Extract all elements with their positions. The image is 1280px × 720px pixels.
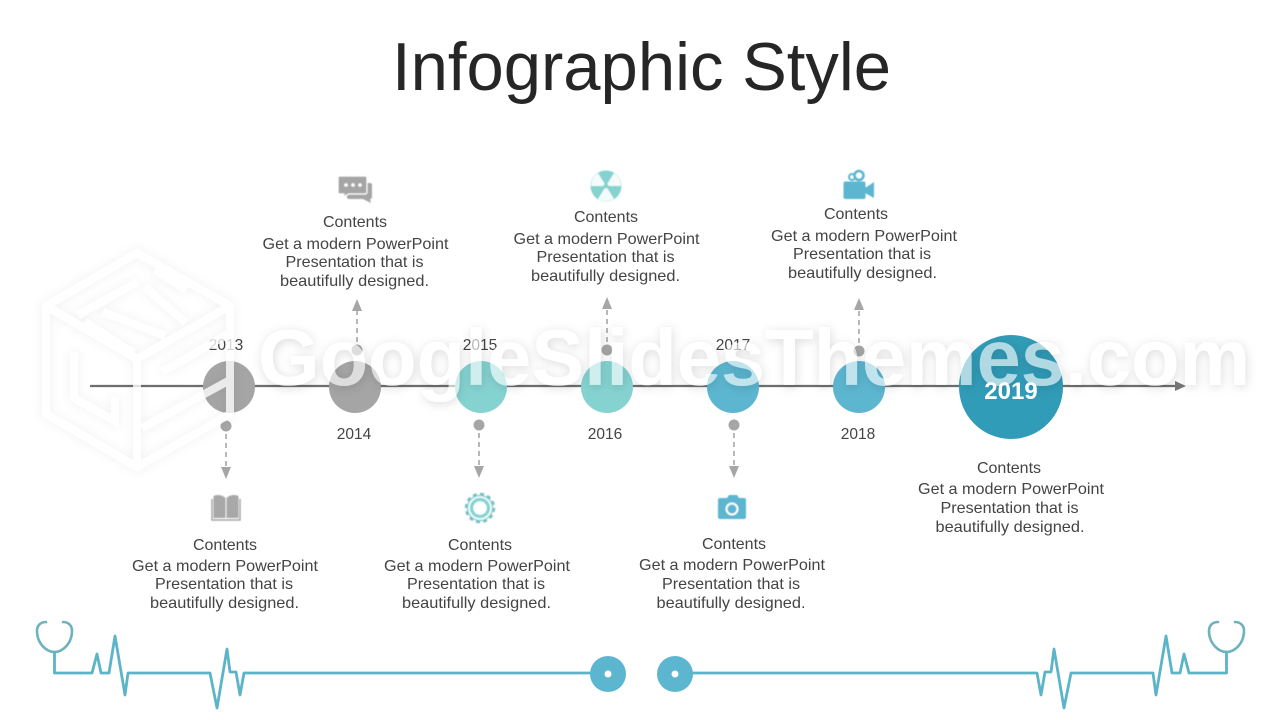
node 2013 — [203, 361, 255, 413]
text block: 2013: Get a modern PowerPoint — [132, 558, 319, 575]
arrow down 2013 — [220, 420, 232, 479]
icon: radiation — [590, 170, 622, 202]
text block: 2018: Contents — [824, 206, 888, 223]
text block: 2017: beautifully designed. — [656, 595, 806, 612]
text block: 2019: Presentation that is — [940, 500, 1078, 517]
text block: 2017: Presentation that is — [662, 576, 800, 593]
icon: gear — [466, 494, 494, 522]
left stethoscope and ECG line — [37, 622, 592, 708]
text block: 2015: Contents — [448, 537, 512, 554]
text block: 2017: Contents — [702, 536, 766, 553]
text block: 2016: Presentation that is — [536, 249, 674, 266]
node 2015 — [455, 361, 507, 413]
right stethoscope and ECG line — [692, 622, 1244, 708]
year labels — [209, 337, 875, 443]
icon: speech bubbles — [338, 176, 372, 203]
text block: 2015: Get a modern PowerPoint — [384, 558, 571, 575]
text block: 2013: Contents — [193, 537, 257, 554]
text block: 2013: Presentation that is — [155, 576, 293, 593]
text block: 2013 — [132, 537, 319, 612]
year labels: 2013 — [209, 337, 243, 354]
text block: 2019 — [918, 460, 1105, 536]
arrow up 2016 — [602, 297, 612, 356]
text block: 2014 — [262, 214, 449, 290]
text block: 2018: Presentation that is — [793, 246, 931, 263]
footer heartbeat with stethoscopes — [37, 622, 1244, 708]
node 2016 — [581, 361, 633, 413]
arrow down 2017 — [728, 420, 740, 478]
node 2018 — [833, 361, 885, 413]
text block: 2014: beautifully designed. — [280, 273, 429, 290]
icon: video camera — [844, 171, 874, 199]
text block: 2013: beautifully designed. — [150, 595, 299, 612]
arrow up 2018 — [854, 298, 864, 356]
text block: 2014: Get a modern PowerPoint — [262, 236, 449, 253]
year labels: 2015 — [463, 337, 497, 354]
node 2019 — [959, 335, 1063, 439]
icon: open book — [212, 495, 240, 520]
left end node — [590, 656, 626, 692]
timeline axis arrow — [90, 381, 1186, 391]
text block: 2015: Presentation that is — [407, 576, 545, 593]
year labels: 2017 — [716, 337, 750, 354]
text block: 2018: Get a modern PowerPoint — [771, 228, 958, 245]
text block: 2016: Get a modern PowerPoint — [514, 231, 700, 248]
text block: 2015 — [384, 537, 571, 612]
text block: 2018: beautifully designed. — [788, 265, 937, 282]
year labels: 2018 — [841, 426, 875, 443]
text block: 2017 — [639, 536, 826, 612]
year labels: 2014 — [337, 426, 372, 443]
text block: 2018 — [771, 206, 958, 282]
timeline nodes — [203, 335, 1063, 439]
right end node — [657, 656, 693, 692]
text block: 2016: Contents — [574, 209, 638, 226]
year labels: 2016 — [588, 426, 622, 443]
arrow down 2015 — [474, 420, 484, 478]
text block: 2014: Contents — [323, 214, 387, 231]
node 2017 — [707, 361, 759, 413]
node 2014 — [329, 361, 381, 413]
text block: 2019: Get a modern PowerPoint — [918, 481, 1105, 498]
text block: 2016: beautifully designed. — [531, 268, 680, 285]
text block: 2019: beautifully designed. — [936, 519, 1084, 536]
watermark text: GoogleSlidesThemes.com — [258, 313, 1250, 402]
text block: 2017: Get a modern PowerPoint — [639, 557, 826, 574]
year label 2019: 2019 — [984, 378, 1038, 405]
watermark logo: cube — [46, 253, 230, 467]
text block: 2014: Presentation that is — [286, 254, 424, 271]
title: Infographic Style — [392, 29, 891, 105]
text block: 2016 — [514, 209, 700, 285]
dashed connector arrows — [220, 297, 864, 479]
text block: 2019: Contents — [977, 460, 1041, 477]
text block: 2015: beautifully designed. — [402, 595, 551, 612]
arrow up 2014 — [352, 299, 362, 356]
icon: camera — [718, 495, 746, 519]
